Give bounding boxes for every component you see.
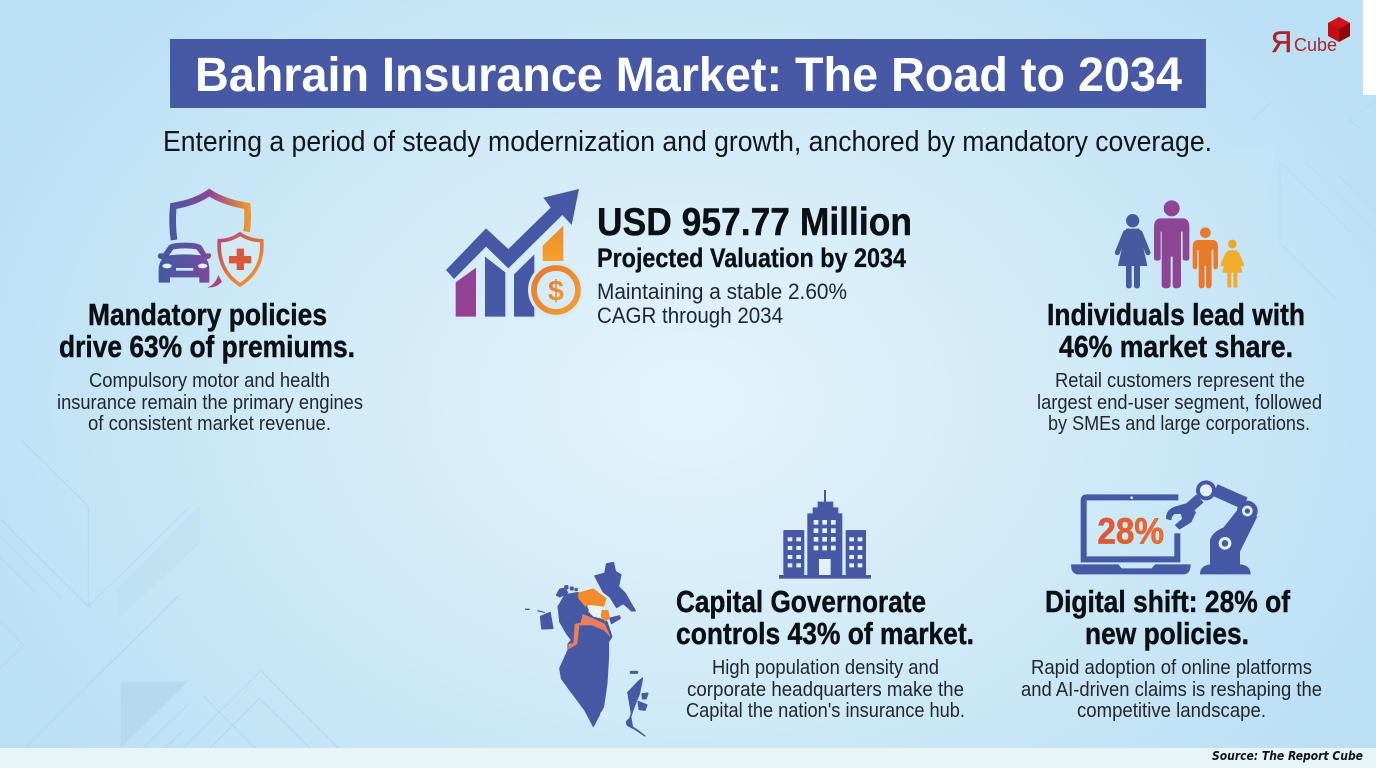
headline value: USD 957.77 Million [597,201,912,244]
text block [686,656,965,722]
heading: Capital Governorate [676,584,926,619]
text block: Rapid adoption of online platforms [1031,656,1312,679]
heading: Individuals lead with [1047,297,1305,332]
icon: family [1117,200,1242,288]
logo: Cube [1294,34,1337,55]
icon: buildings [779,490,871,579]
subtitle: Entering a period of steady modernization and growth, anchored by mandatory coverage. [163,126,1212,158]
text block [1037,369,1322,435]
text block: High population density and [712,656,939,679]
panel: mandatory policies [57,193,363,435]
heading: drive 63% of premiums. [59,329,355,364]
heading: Mandatory policies [88,297,327,332]
logo: Я [1271,26,1292,59]
text block: insurance remain the primary engines [57,391,363,414]
text block: Maintaining a stable 2.60% [597,279,847,304]
background pattern: top right [1140,100,1376,300]
text block: corporate headquarters make the [687,678,964,701]
panel: capital governorate [525,490,974,737]
icon: growth chart with coin: $ [548,275,564,307]
icon: map of Bahrain [525,563,648,737]
background pattern: bottom left [0,440,338,748]
panel: valuation [446,189,912,328]
text block [57,369,363,435]
panel: digital shift [1021,480,1322,722]
heading: controls 43% of market. [676,616,974,651]
text block: largest end-user segment, followed [1037,391,1322,414]
text block [597,279,847,328]
heading: Digital shift: 28% of [1045,584,1291,619]
white corner patch [1363,0,1376,95]
icon: growth chart with coin [446,189,584,318]
text block [1021,656,1322,722]
heading [1045,584,1291,651]
heading [59,297,355,364]
text block: CAGR through 2034 [597,303,783,328]
logo [1271,17,1350,59]
text block: Capital the nation's insurance hub. [686,699,965,722]
title banner: Bahrain Insurance Market: The Road to 2034 [195,49,1182,102]
footer band [0,748,1376,768]
subheading: Projected Valuation by 2034 [597,243,906,273]
icon: laptop and robot arm: 28% [1097,510,1164,551]
panel: individuals [1037,200,1322,435]
heading [1047,297,1305,364]
heading [676,584,974,651]
heading: 46% market share. [1059,329,1293,364]
source note: Source: The Report Cube [1212,749,1363,763]
text block: Compulsory motor and health [89,369,330,392]
text block: competitive landscape. [1077,699,1266,722]
icon: car and shield [158,193,262,287]
heading: new policies. [1085,616,1249,651]
text block: Retail customers represent the [1055,369,1305,392]
icon: laptop and robot arm [1071,480,1258,574]
text block: of consistent market revenue. [88,412,331,435]
text block: and AI-driven claims is reshaping the [1021,678,1322,701]
text block: by SMEs and large corporations. [1048,412,1310,435]
